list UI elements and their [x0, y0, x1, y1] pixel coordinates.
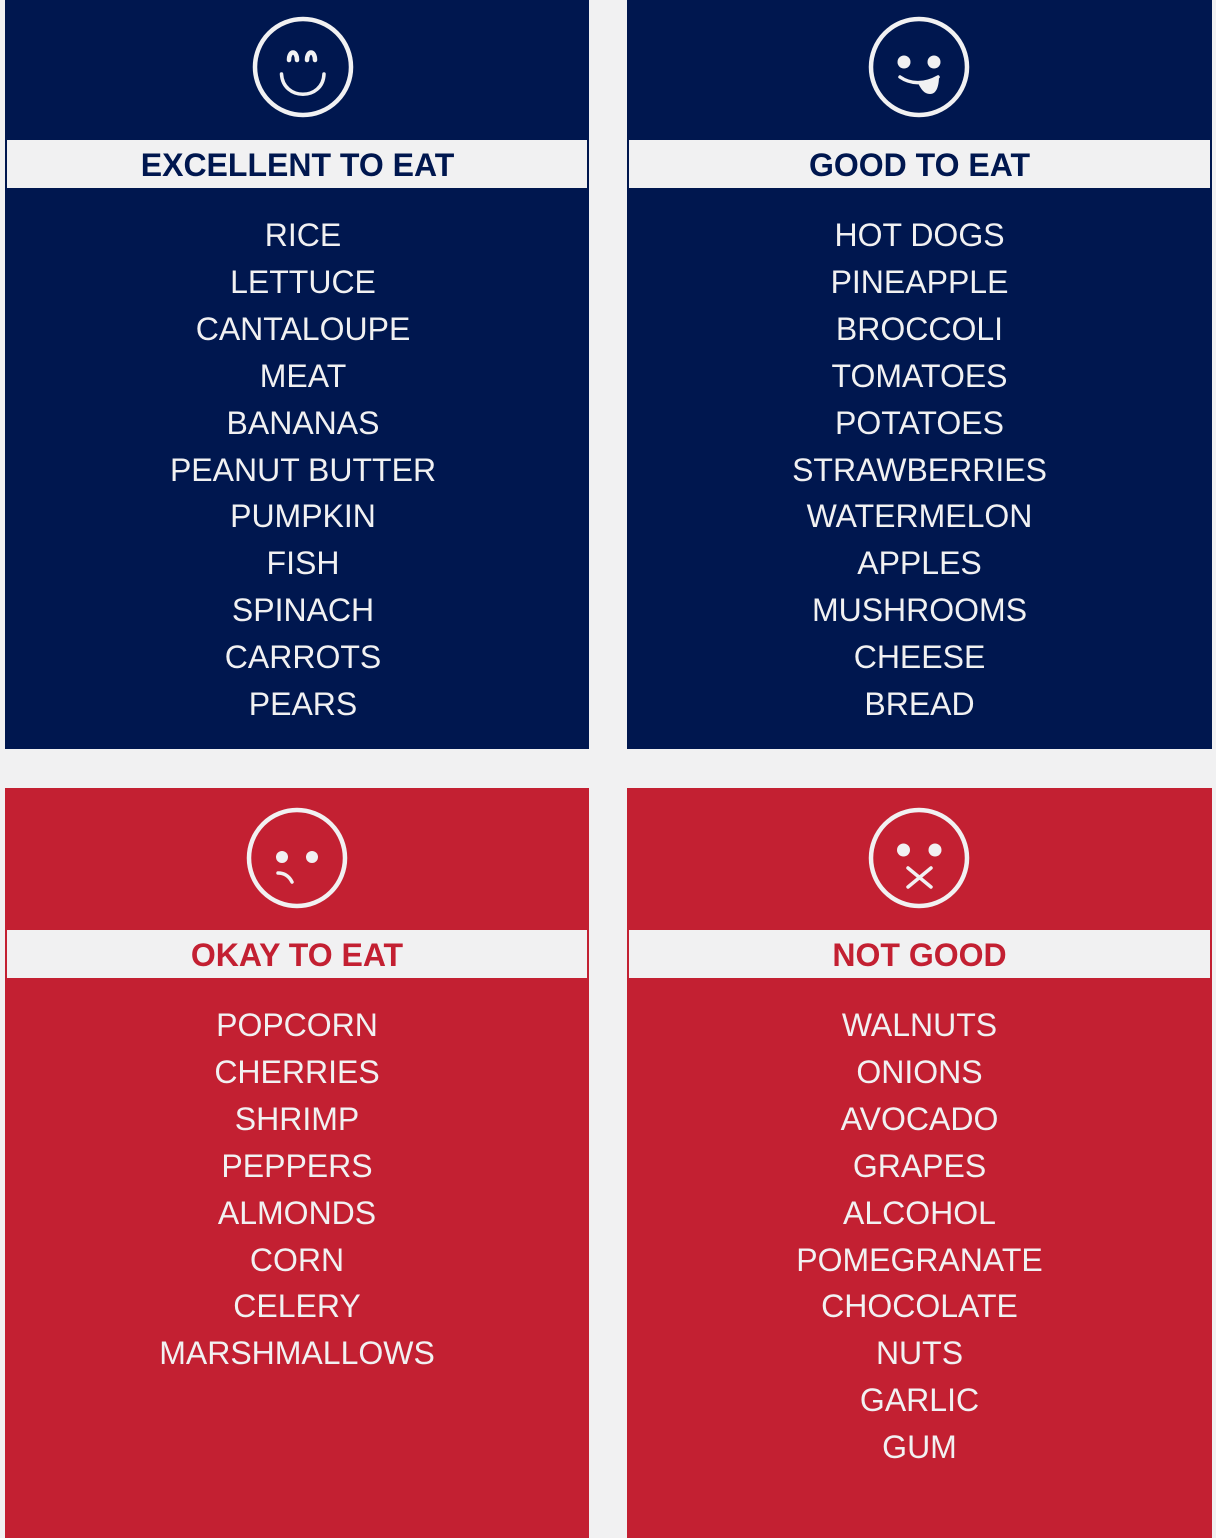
- list: good foods: HOT DOGS: [834, 217, 1005, 253]
- heading: okay to eat: [7, 930, 587, 978]
- list: okay foods: POPCORN: [216, 1007, 378, 1043]
- heading: good to eat: [629, 140, 1210, 188]
- list: excellent foods: LETTUCE: [230, 264, 376, 300]
- heading: not good: NOT GOOD: [832, 937, 1007, 973]
- list: not good foods: GUM: [882, 1429, 957, 1465]
- list: good foods: POTATOES: [835, 405, 1004, 441]
- list: excellent foods: PEARS: [249, 686, 357, 722]
- list: excellent foods: PUMPKIN: [230, 498, 376, 534]
- panel: okay to eat: [5, 788, 589, 1538]
- list: good foods: BROCCOLI: [836, 311, 1003, 347]
- heading: not good: [629, 930, 1210, 978]
- icon: uneasy face: [246, 808, 348, 908]
- list: excellent foods: BANANAS: [227, 405, 379, 441]
- list: good foods: TOMATOES: [831, 358, 1008, 394]
- list: excellent foods: SPINACH: [232, 592, 374, 628]
- list: okay foods: MARSHMALLOWS: [159, 1335, 435, 1371]
- list: good foods: [792, 217, 1047, 722]
- heading: excellent to eat: [7, 140, 587, 188]
- list: not good foods: CHOCOLATE: [821, 1288, 1018, 1324]
- list: okay foods: SHRIMP: [235, 1101, 359, 1137]
- list: excellent foods: [170, 217, 436, 722]
- list: okay foods: PEPPERS: [221, 1148, 373, 1184]
- list: not good foods: WALNUTS: [842, 1007, 997, 1043]
- list: okay foods: ALMONDS: [218, 1195, 376, 1231]
- list: not good foods: GARLIC: [860, 1382, 979, 1418]
- list: excellent foods: MEAT: [260, 358, 346, 394]
- list: okay foods: [159, 1007, 435, 1371]
- heading: excellent to eat: EXCELLENT TO EAT: [141, 147, 454, 183]
- icon: face with crossed mouth: [868, 808, 970, 908]
- panel: good to eat: [627, 0, 1212, 749]
- heading: good to eat: GOOD TO EAT: [809, 147, 1030, 183]
- list: not good foods: AVOCADO: [841, 1101, 998, 1137]
- icon: face with tongue: [868, 16, 970, 118]
- list: good foods: CHEESE: [854, 639, 985, 675]
- list: good foods: APPLES: [857, 545, 982, 581]
- icon: smiling face: [252, 16, 354, 118]
- list: good foods: BREAD: [864, 686, 975, 722]
- list: excellent foods: CANTALOUPE: [196, 311, 410, 347]
- list: good foods: WATERMELON: [807, 498, 1032, 534]
- list: good foods: MUSHROOMS: [812, 592, 1027, 628]
- list: not good foods: NUTS: [876, 1335, 963, 1371]
- list: not good foods: [796, 1007, 1043, 1465]
- heading: okay to eat: OKAY TO EAT: [191, 937, 403, 973]
- list: good foods: PINEAPPLE: [831, 264, 1008, 300]
- list: good foods: STRAWBERRIES: [792, 452, 1047, 488]
- list: excellent foods: PEANUT BUTTER: [170, 452, 436, 488]
- list: not good foods: GRAPES: [853, 1148, 986, 1184]
- list: okay foods: CELERY: [233, 1288, 361, 1324]
- list: excellent foods: FISH: [267, 545, 339, 581]
- panel: excellent to eat: [5, 0, 589, 749]
- list: not good foods: ALCOHOL: [843, 1195, 996, 1231]
- list: okay foods: CORN: [250, 1242, 344, 1278]
- panel: not good: [627, 788, 1212, 1538]
- list: excellent foods: CARROTS: [225, 639, 381, 675]
- list: not good foods: POMEGRANATE: [796, 1242, 1043, 1278]
- list: excellent foods: RICE: [265, 217, 341, 253]
- list: not good foods: ONIONS: [856, 1054, 983, 1090]
- list: okay foods: CHERRIES: [214, 1054, 380, 1090]
